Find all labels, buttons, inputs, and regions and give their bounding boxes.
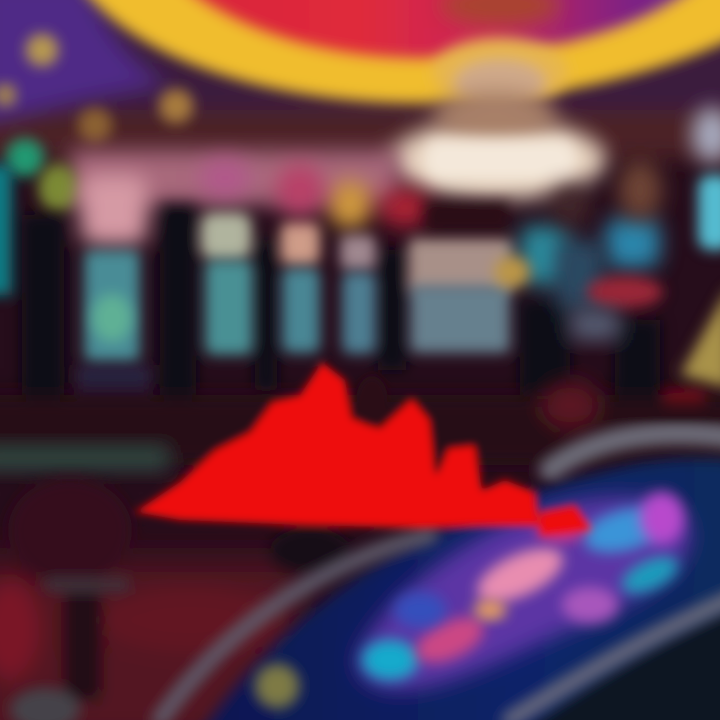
- slot machine: second: [200, 212, 253, 355]
- dark notch in red chart: [356, 376, 388, 424]
- yellow ceiling arc and rainbow dome: [70, 0, 720, 103]
- central golden crest: [432, 38, 568, 106]
- game table body: [190, 458, 720, 720]
- yellow token on table: [255, 664, 299, 708]
- round stool: [8, 478, 132, 720]
- red bar-shaped chart: [135, 362, 592, 536]
- left edge green lights: [0, 139, 78, 295]
- slot machine: fourth: [328, 181, 376, 354]
- chandelier: [390, 91, 606, 200]
- person at right edge: [662, 107, 720, 428]
- magenta machine tops: [199, 158, 431, 228]
- bottom red carpet: [0, 560, 300, 720]
- slot machine: wide right: [408, 200, 513, 353]
- lower dark floor: [0, 380, 720, 471]
- glowing game screen on table: [357, 492, 690, 690]
- purple ceiling corner with lights: [0, 0, 193, 142]
- ceiling band: [0, 0, 720, 160]
- crowd of people: [494, 160, 663, 340]
- wall glow behind the machines: [70, 150, 400, 205]
- dark machine columns: [22, 205, 660, 420]
- slot machine: left: [76, 175, 151, 395]
- slot machine: third: [280, 222, 320, 353]
- table metallic rim: [160, 433, 720, 720]
- dark shadow under red chart: [270, 528, 350, 572]
